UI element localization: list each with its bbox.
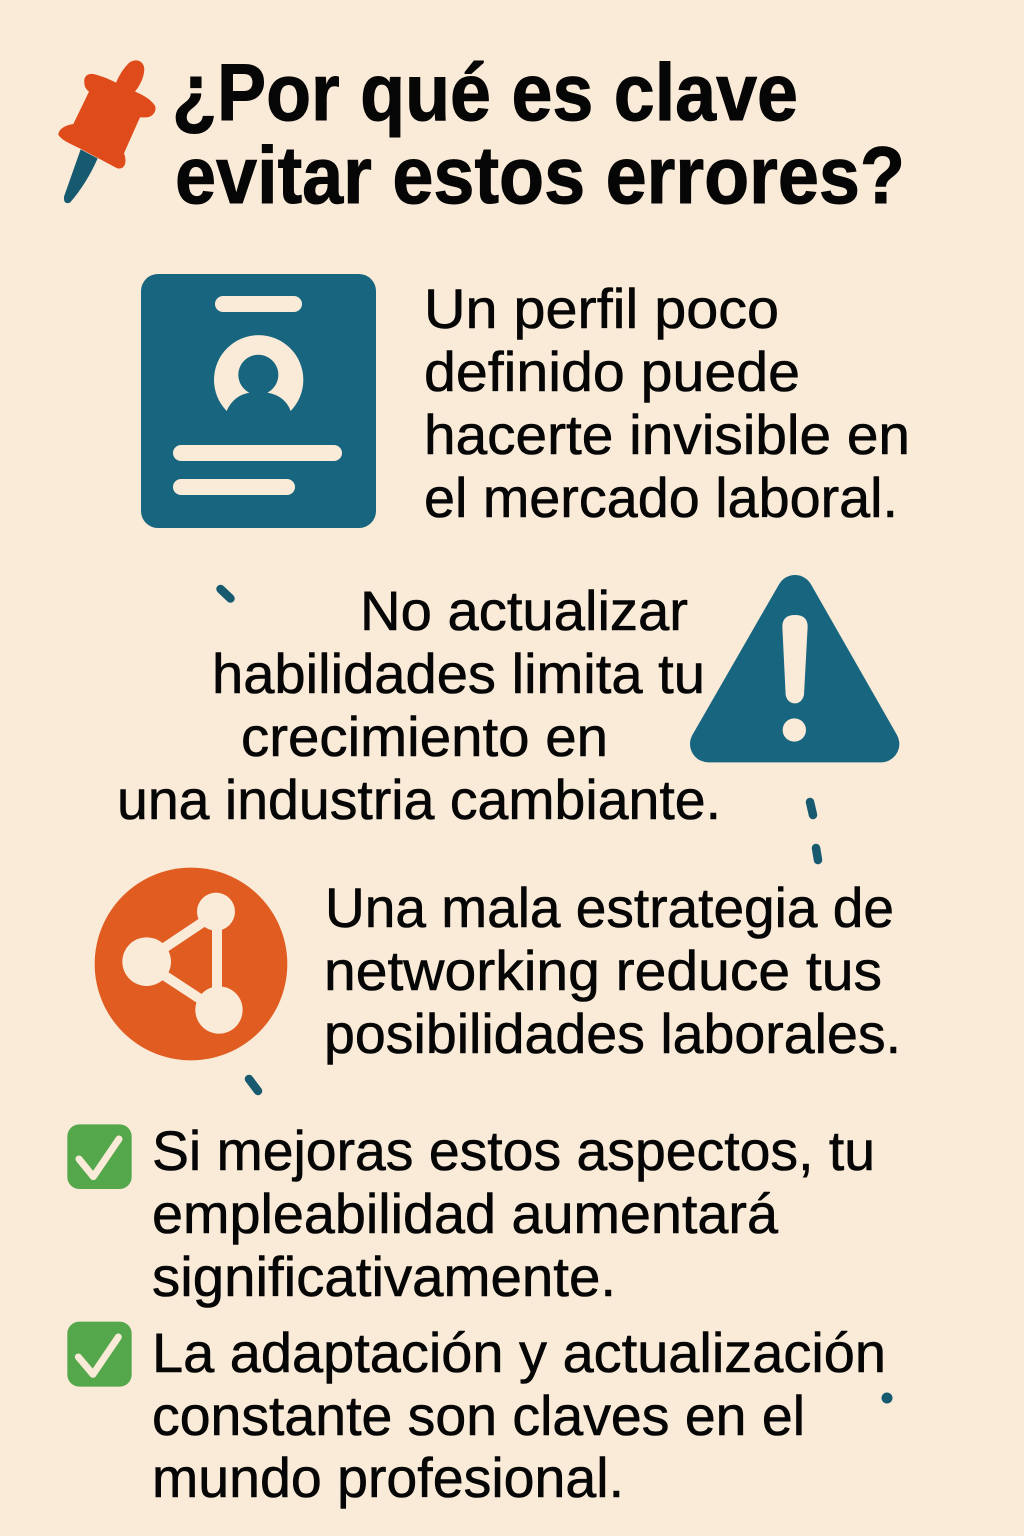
text: poor networking bbox=[324, 876, 901, 1065]
decorative dashes bbox=[220, 589, 818, 1091]
icon: warning triangle bbox=[708, 593, 881, 744]
text: undefined profile: Un perfil poco bbox=[424, 277, 779, 340]
text: undefined profile: el mercado laboral. bbox=[424, 466, 898, 529]
text: outdated skills: crecimiento en bbox=[241, 705, 608, 768]
text: adaptation bbox=[152, 1321, 886, 1509]
title: evitar estos errores? bbox=[175, 131, 905, 221]
icon: check mark one bbox=[67, 1124, 132, 1189]
text: improvement: empleabilidad aumentará bbox=[152, 1182, 779, 1245]
text: undefined profile bbox=[424, 277, 910, 529]
text: outdated skills: habilidades limita tu bbox=[212, 642, 705, 705]
icon: push pin bbox=[58, 60, 156, 203]
title bbox=[172, 48, 905, 221]
text: improvement: Si mejoras estos aspectos, tu bbox=[152, 1119, 875, 1182]
text: improvement: significativamente. bbox=[152, 1245, 616, 1308]
title: ¿Por qué es clave bbox=[172, 48, 798, 138]
text: poor networking: networking reduce tus bbox=[324, 939, 882, 1002]
icon: check mark two bbox=[67, 1322, 132, 1387]
decorative dot bbox=[882, 1392, 892, 1404]
text: outdated skills bbox=[117, 579, 721, 831]
text: adaptation: mundo profesional. bbox=[152, 1446, 624, 1509]
text: adaptation: constante son claves en el bbox=[152, 1384, 805, 1447]
text: outdated skills: una industria cambiante. bbox=[117, 768, 721, 831]
text: poor networking: posibilidades laborales. bbox=[324, 1002, 901, 1065]
text: undefined profile: hacerte invisible en bbox=[424, 403, 910, 466]
text: poor networking: Una mala estrategia de bbox=[325, 876, 894, 939]
text: outdated skills: No actualizar bbox=[360, 579, 688, 642]
icon: profile card bbox=[141, 274, 376, 528]
text: improvement bbox=[152, 1119, 875, 1308]
text: undefined profile: definido puede bbox=[424, 340, 800, 403]
icon: networking circle bbox=[95, 868, 287, 1060]
text: adaptation: La adaptación y actualización bbox=[152, 1321, 886, 1384]
